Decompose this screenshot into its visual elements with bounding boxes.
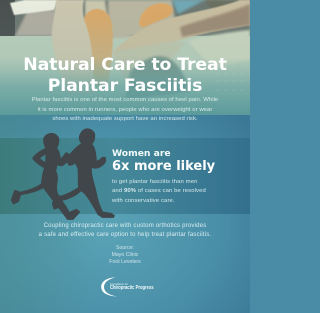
stat detail: with conservative care. <box>112 198 175 204</box>
intro text <box>32 97 218 122</box>
intro text: it is more common in runners, people who are overweight or wear <box>38 106 212 112</box>
sources <box>109 244 141 265</box>
sources: Mayo Clinic <box>112 252 138 258</box>
stat detail <box>112 178 206 204</box>
sources: Foot Levelers <box>109 259 141 265</box>
logo: Foundation for Chiropractic Progress <box>101 277 154 297</box>
logo name: Chiropractic Progress <box>110 284 154 290</box>
intro text: Plantar fasciitis is one of the most common causes of heel pain. While <box>32 97 218 103</box>
logo small text: Foundation for <box>110 282 128 286</box>
title: Natural Care to Treat <box>23 55 227 75</box>
left hand <box>52 0 94 95</box>
runner silhouettes <box>12 129 114 219</box>
closing text <box>38 222 211 238</box>
logo arc <box>101 277 117 297</box>
heels <box>83 9 113 88</box>
sources: Source: <box>116 244 134 250</box>
stat callout <box>112 148 215 204</box>
title <box>23 55 227 96</box>
lower background <box>0 100 250 313</box>
stat detail: to get plantar fasciitis than men <box>112 178 198 184</box>
stat detail: and 90% of cases can be resolved <box>112 188 206 194</box>
runner right <box>53 129 114 217</box>
intro text: shoes with inadequate support have an increased risk. <box>52 116 198 122</box>
right arm <box>113 0 250 70</box>
stat lead: Women are <box>112 148 171 159</box>
dot texture <box>217 65 243 91</box>
photo: hands on foot <box>0 0 250 115</box>
closing text: a safe and effective care option to help treat plantar fasciitis. <box>39 232 211 238</box>
teal fade <box>0 0 250 115</box>
dark teal band <box>0 138 250 214</box>
runner left <box>12 134 79 219</box>
background <box>0 0 250 313</box>
title: Plantar Fasciitis <box>48 76 202 96</box>
stat figure: 6x more likely <box>112 159 215 174</box>
closing text: Coupling chiropractic care with custom orthotics provides <box>44 223 206 229</box>
